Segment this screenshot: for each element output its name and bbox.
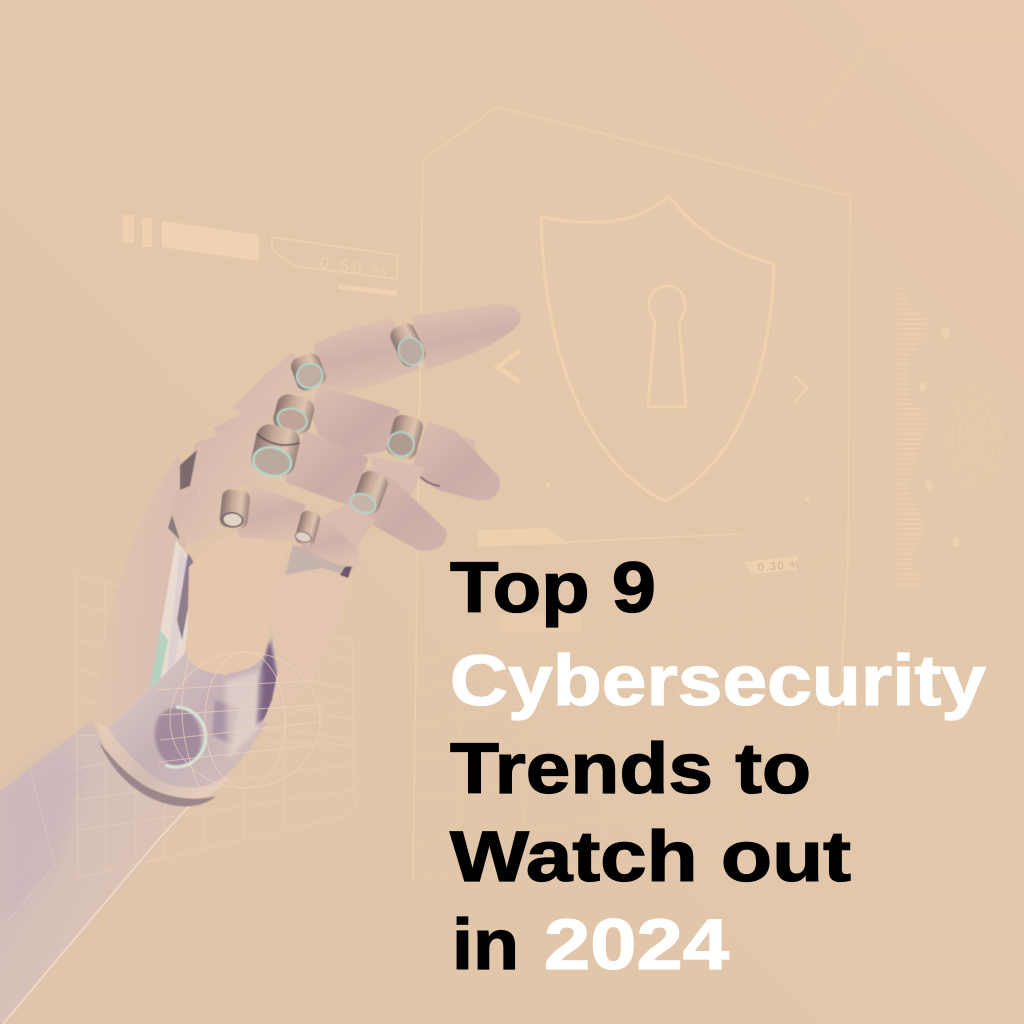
joint pinky upper (294, 509, 322, 547)
HUD top left gauge bars (123, 215, 397, 296)
pinky finger (168, 483, 376, 568)
title (450, 549, 987, 985)
joint index upper (387, 320, 429, 370)
thumb side (262, 573, 350, 724)
joint middle upper (385, 413, 425, 461)
equalizer bars (897, 289, 927, 584)
forearm (0, 720, 190, 1024)
middle finger (213, 385, 500, 500)
knuckle left (180, 450, 197, 490)
wire grid left (75, 575, 355, 878)
HUD panel outline (413, 38, 1024, 878)
joint index lower (288, 351, 328, 393)
radar target (945, 389, 1001, 487)
HUD dots (546, 327, 959, 547)
joint ring upper (348, 468, 390, 518)
title line: Cybersecurity: Cybersecurity (450, 642, 987, 721)
robot hand (97, 304, 520, 806)
title line: Top 9: Top 9 (450, 549, 656, 628)
back of hand (97, 455, 205, 745)
title line: 2024: 2024 (544, 906, 730, 985)
joint pinky base (219, 489, 251, 529)
HUD top left gauge bars: 0.50 % (318, 253, 391, 282)
chevron arrows (498, 352, 807, 402)
title line: Watch out: Watch out (450, 818, 851, 897)
index finger (233, 304, 520, 420)
title line: Trends to: Trends to (450, 730, 811, 809)
ring finger (186, 420, 446, 550)
wrist band (97, 722, 240, 799)
highlight patches (225, 670, 262, 760)
joint middle lower (271, 392, 317, 436)
knuckle joints (168, 320, 429, 547)
pale palm (187, 533, 293, 673)
shield with keyhole (541, 196, 774, 501)
chrome strip (150, 540, 196, 692)
perspective mesh right (413, 555, 843, 878)
HUD lower panel and tag: 0.30 % (757, 559, 801, 574)
teal ring (165, 707, 206, 767)
dark reflections (155, 640, 278, 766)
chrome cavity (108, 636, 279, 798)
HUD lower panel and tag (478, 528, 801, 632)
joint ring base (249, 422, 302, 480)
title line: in: in (452, 906, 519, 985)
wire globe overlay (155, 652, 320, 790)
